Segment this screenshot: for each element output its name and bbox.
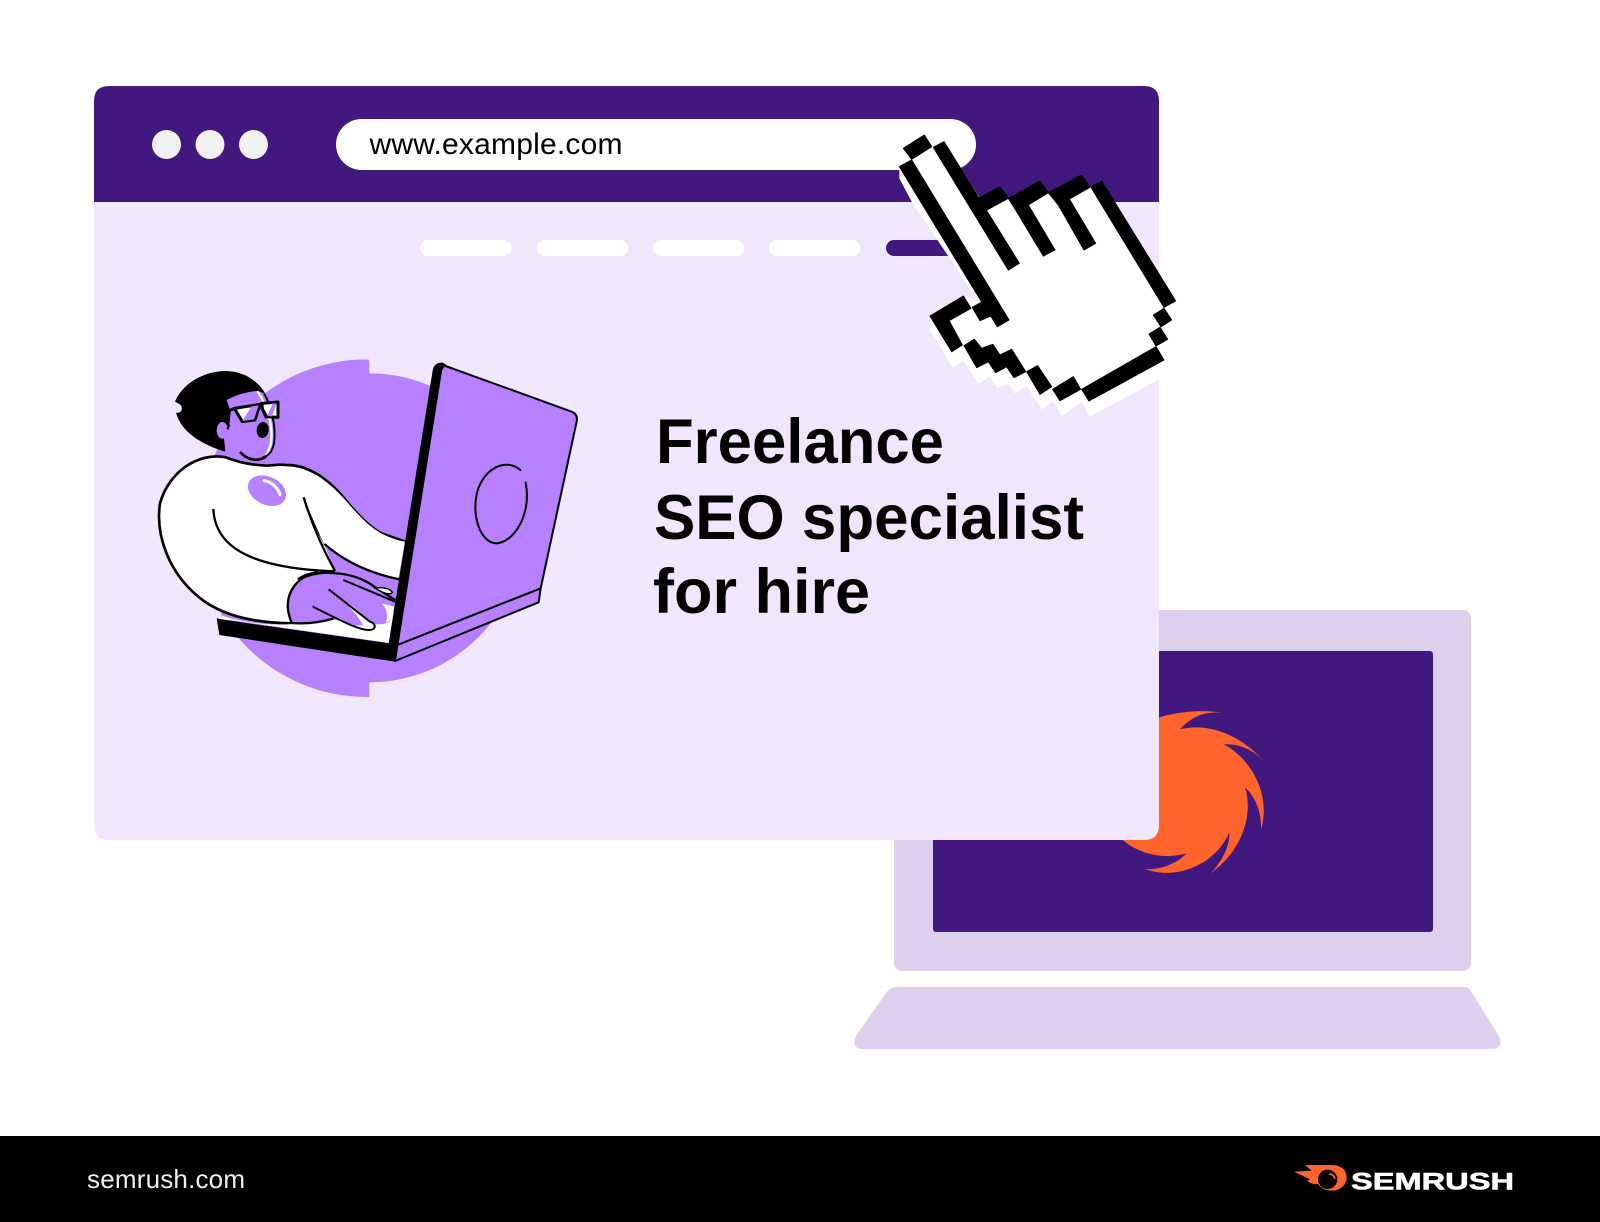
fingers	[372, 585, 392, 594]
logo wordmark: SEMRUSH	[1351, 1168, 1514, 1196]
logo flame	[1294, 1165, 1347, 1191]
heading: Freelance	[656, 407, 944, 477]
heading: SEO specialist	[654, 483, 1084, 553]
ear	[217, 422, 228, 439]
laptop lid	[397, 364, 577, 645]
footer bar	[0, 1136, 1600, 1222]
body and arm	[159, 456, 405, 623]
illustration: person at laptop	[159, 359, 577, 697]
address bar: www.example.com	[368, 128, 622, 161]
address bar	[336, 119, 976, 170]
keyboard deck	[217, 616, 397, 644]
glasses	[229, 402, 278, 422]
browser window	[94, 86, 1159, 840]
heading: for hire	[653, 557, 870, 627]
chest patch	[243, 470, 291, 512]
arm fill over inner area	[303, 475, 405, 579]
window control dots	[152, 130, 268, 159]
laptop base bevel	[395, 588, 541, 661]
semrush logo	[1294, 1165, 1514, 1196]
face highlight and outline	[227, 391, 275, 457]
laptop in background	[855, 610, 1500, 1049]
icon: pixel hand cursor	[899, 135, 1176, 417]
icon: orange spiral on laptop screen	[1101, 711, 1266, 873]
face	[224, 391, 274, 466]
hair	[175, 371, 266, 452]
heading	[653, 407, 1084, 627]
hand	[288, 573, 397, 626]
mouth	[256, 421, 270, 439]
purple circle backdrop	[198, 359, 524, 697]
footer url: semrush.com	[87, 1164, 245, 1194]
clothing lines	[213, 509, 335, 571]
navigation pills	[420, 240, 978, 256]
